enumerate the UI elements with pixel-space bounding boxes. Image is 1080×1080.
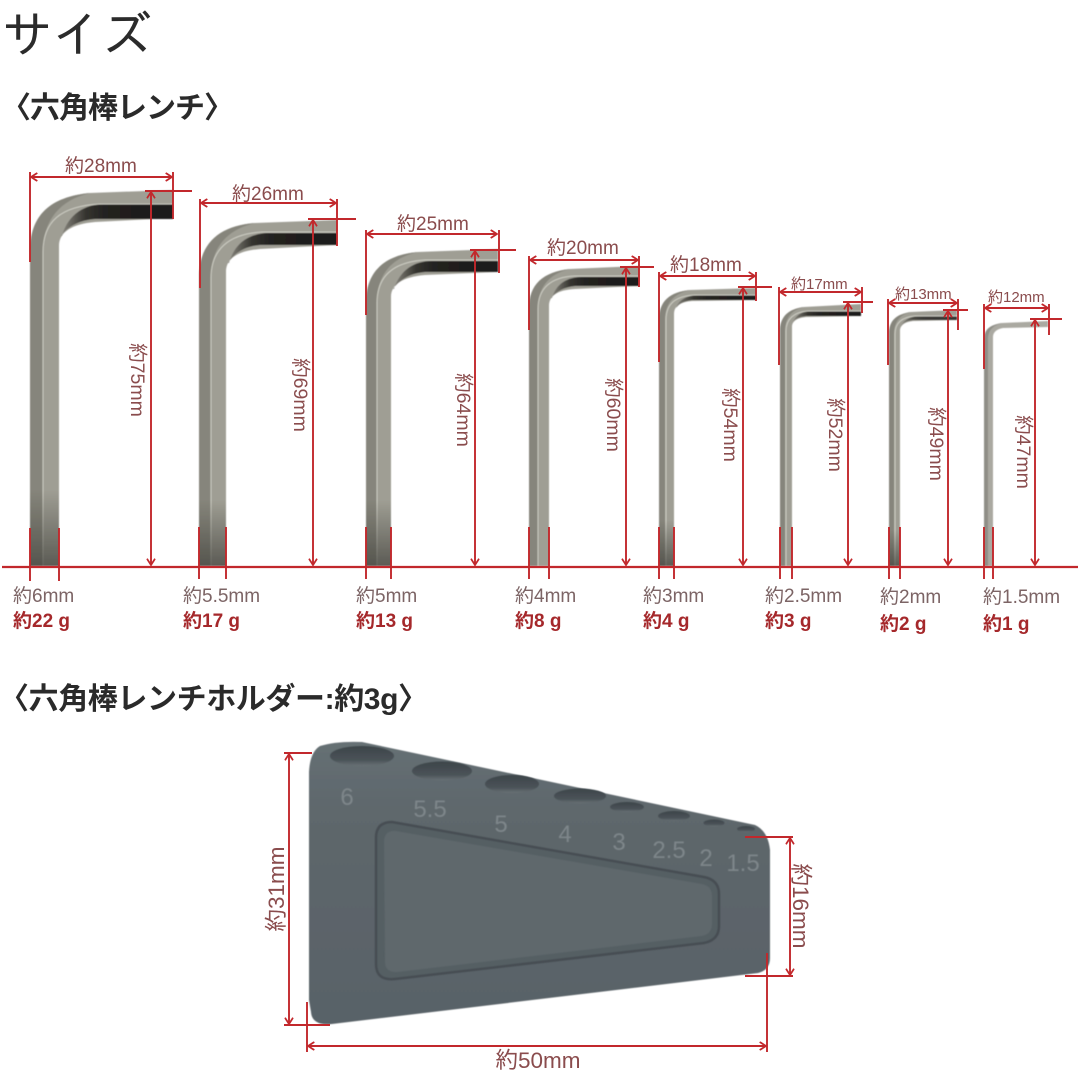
engraved size numbers: 4 [558,821,572,848]
diameter labels: 約6mm [13,585,74,607]
diameter labels: 約5mm [356,585,417,607]
diameter labels [13,585,1060,608]
width labels: 約25mm [397,213,469,235]
engraved size numbers: 3 [612,829,626,856]
diameter labels: 約1.5mm [983,586,1060,608]
dimension lines: 5.5mm wrench [199,199,356,579]
weight labels: 約3 g [765,610,811,632]
engraved size numbers: 6 [340,784,354,811]
width labels: 約18mm [670,254,742,276]
diameter labels: 約2mm [880,586,941,608]
length labels: 約64mm [452,373,474,447]
width labels: 約26mm [232,183,304,205]
engraved size numbers: 5 [494,811,508,838]
holder dimension lines [284,753,793,1052]
wrench 6mm [30,190,173,566]
diameter labels: 約2.5mm [765,585,842,607]
weight labels: 約2 g [880,613,926,635]
engraved size numbers: 2.5 [652,837,686,864]
dimension lines: 1.5mm wrench [984,304,1062,579]
engraved size numbers: 5.5 [413,796,447,823]
holder labels: 約50mm [495,1048,581,1073]
engraved size numbers: 2 [699,845,713,872]
width labels: 約12mm [988,289,1045,306]
panel: wrench holder [309,742,770,1024]
dimension lines: 3mm wrench [659,272,772,579]
width labels: 約17mm [791,276,848,293]
dimension lines: 2.5mm wrench [779,287,873,579]
wrench 5mm [366,249,498,566]
heading: holder: 〈六角棒レンチホルダー:約3g〉 [0,682,428,716]
recessed panel face [384,831,712,972]
dimension lines: 4mm wrench [529,256,654,579]
wrench 2mm [889,310,957,566]
diameter labels: 約5.5mm [183,585,260,607]
width labels: 約13mm [895,286,952,303]
wrench 5.5mm [199,220,337,566]
dimension lines: 6mm wrench [30,172,192,581]
panel: hex wrench set [30,190,1048,566]
weight labels [13,610,1029,635]
dimension lines: 5mm wrench [366,230,516,579]
holder labels: 約16mm [788,863,813,949]
dimension lines: 2mm wrench [888,299,968,579]
engraved size numbers: 1.5 [726,850,760,877]
length labels: 約47mm [1012,415,1034,489]
wrench 3mm [659,288,756,566]
wrench 1.5mm [984,321,1048,566]
length labels: 約54mm [719,388,741,462]
title: サイズ [2,9,152,59]
weight labels: 約8 g [515,610,561,632]
width labels [65,155,1045,306]
holder labels [264,846,813,1073]
weight labels: 約17 g [183,610,240,632]
wrench 2.5mm [780,304,861,566]
length labels: 約60mm [602,378,624,452]
diameter labels: 約4mm [515,585,576,607]
weight labels: 約22 g [13,610,70,632]
length labels: 約75mm [126,343,148,417]
holder body [309,742,770,1024]
weight labels: 約4 g [643,610,689,632]
weight labels: 約13 g [356,610,413,632]
diameter labels: 約3mm [643,585,704,607]
width labels: 約28mm [65,155,137,177]
recessed panel [376,822,719,979]
weight labels: 約1 g [983,613,1029,635]
length labels: 約69mm [289,358,311,432]
holes [330,746,755,832]
length labels: 約52mm [824,398,846,472]
length labels [126,343,1034,489]
baseline [2,566,1078,568]
holder labels: 約31mm [264,846,289,932]
length labels: 約49mm [925,407,947,481]
heading: hex wrenches: 〈六角棒レンチ〉 [1,92,234,125]
width labels: 約20mm [547,237,619,259]
engraved size numbers [340,784,760,877]
wrench 4mm [529,266,639,566]
